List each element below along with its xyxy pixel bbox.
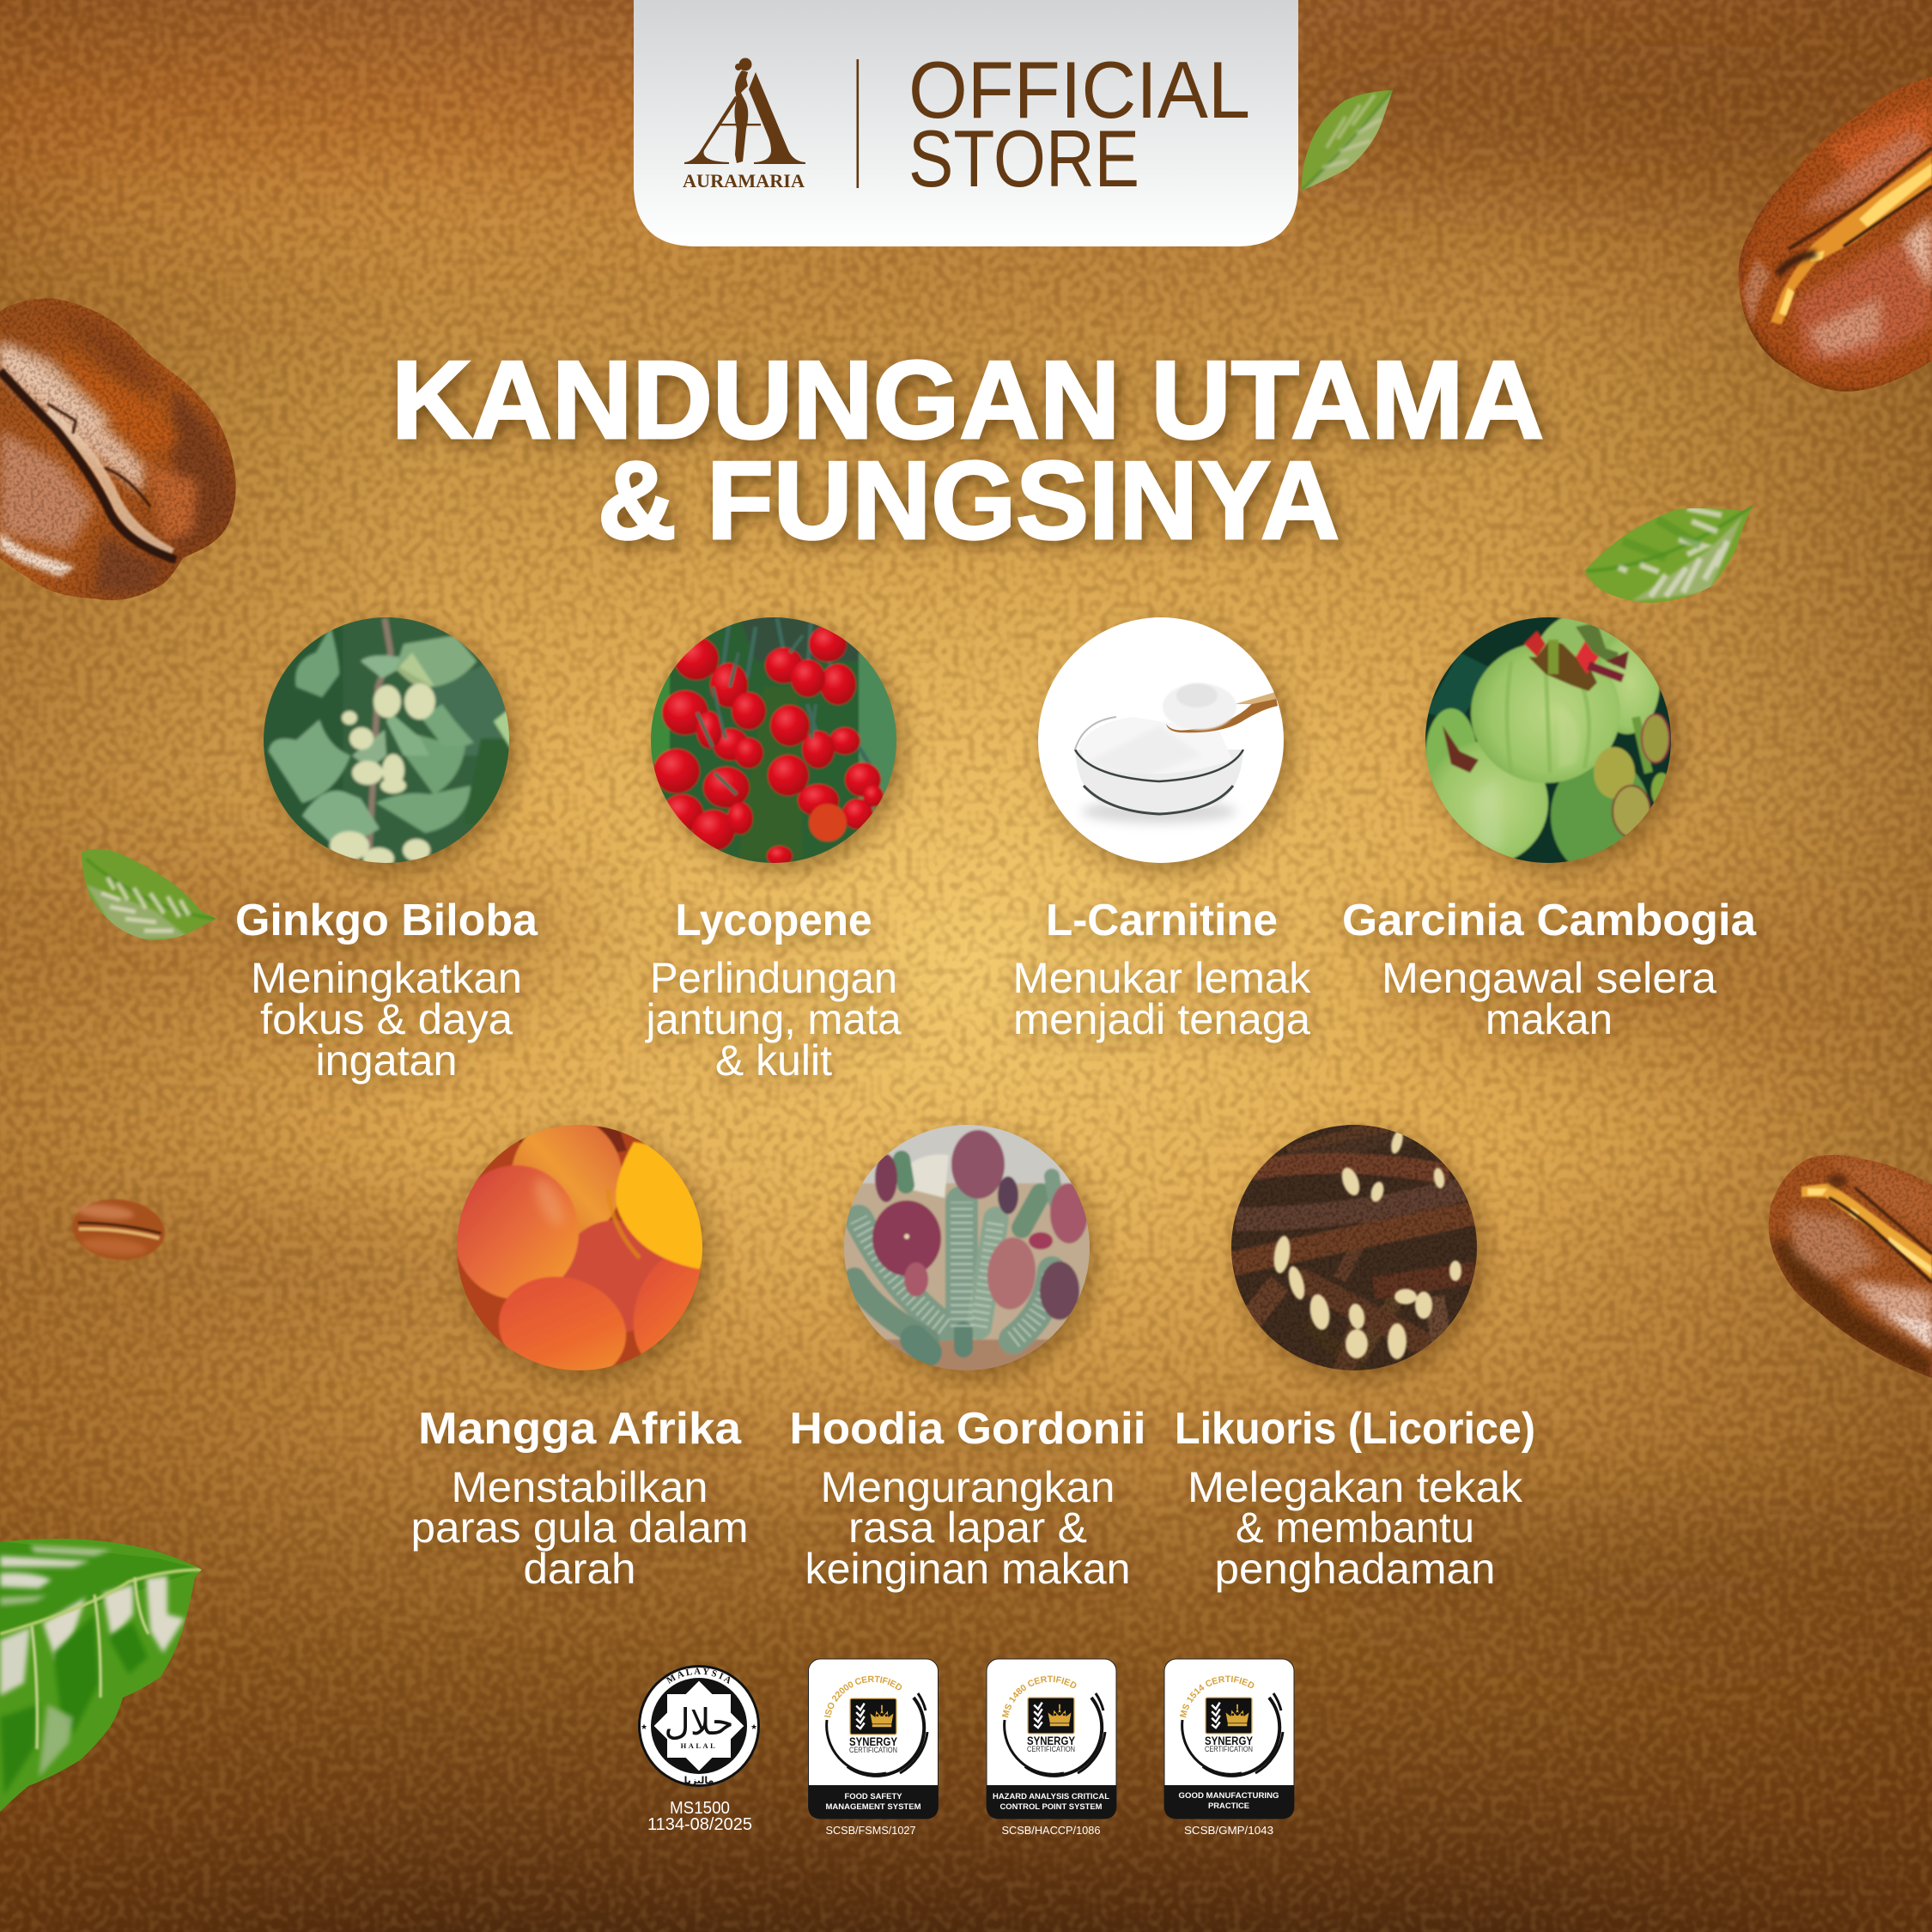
coffee bean: small left (70, 1195, 167, 1264)
badge: halal malaysia: 1134-08/2025 (647, 1815, 752, 1834)
title: KANDUNGAN UTAMA (392, 338, 1544, 462)
ingredient: mangga afrika: paras gula dalam (410, 1504, 749, 1552)
ingredient: likuoris (1175, 1404, 1535, 1593)
badge: iso 22000: MANAGEMENT SYSTEM (826, 1802, 921, 1812)
ingredient: hoodia gordonii: keinginan makan (805, 1545, 1130, 1593)
coffee bean: top right (1738, 77, 1932, 392)
coffee bean: right lower (1752, 1142, 1932, 1387)
badge: ms 1514: PRACTICE (1208, 1801, 1249, 1811)
ingredient: lycopene (645, 896, 902, 1084)
photo: lycopene tomatoes (644, 614, 902, 867)
badge: iso 22000: SCSB/FSMS/1027 (826, 1824, 915, 1837)
photo: ginkgo biloba (258, 614, 515, 870)
ingredient: mangga afrika: darah (524, 1545, 635, 1593)
badge: ms 1480: CONTROL POINT SYSTEM (999, 1802, 1103, 1812)
badge: halal malaysia: ★ (641, 1722, 647, 1731)
ingredient: mangga afrika: Menstabilkan (452, 1463, 708, 1511)
badge: halal malaysia: ماليزيا (684, 1775, 714, 1786)
badge: iso 22000: FOOD SAFETY (845, 1792, 902, 1801)
ingredient: ginkgo biloba: Ginkgo Biloba (235, 896, 538, 945)
badge: ms 1480: SCSB/HACCP/1086 (1001, 1824, 1101, 1837)
circle shadows (270, 626, 1678, 1379)
badge: ms 1514: CERTIFICATION (1205, 1745, 1253, 1753)
ingredient: garcinia cambogia: Mengawal selera (1382, 954, 1716, 1002)
photo: african mango (453, 1117, 718, 1395)
ingredient: likuoris: penghadaman (1214, 1545, 1496, 1593)
ingredient: mangga afrika (410, 1404, 749, 1593)
ingredient: hoodia gordonii: Mengurangkan (821, 1463, 1115, 1511)
divider (857, 59, 859, 188)
ingredient: hoodia gordonii: rasa lapar & (848, 1504, 1087, 1552)
ingredient: hoodia gordonii: Hoodia Gordonii (790, 1404, 1145, 1454)
badge: ms 1514 (1164, 1659, 1294, 1837)
ingredient: lycopene: Perlindungan (650, 954, 897, 1002)
ingredient: l-carnitine: menjadi tenaga (1013, 995, 1310, 1043)
badge: ms 1480: MS 1480 CERTIFIED (1002, 1676, 1077, 1717)
ingredient: likuoris: Melegakan tekak (1188, 1463, 1523, 1511)
store card (634, 0, 1298, 246)
logo: Auramaria (683, 58, 805, 191)
heading: official store: STORE (908, 113, 1139, 204)
ingredient: garcinia cambogia: Garcinia Cambogia (1342, 896, 1757, 945)
title: & FUNGSINYA (598, 439, 1340, 562)
badge: halal malaysia: حلال (664, 1701, 734, 1743)
badge: halal malaysia: MS1500 (670, 1799, 730, 1818)
badge: halal malaysia: HALAL (681, 1741, 717, 1750)
badge: ms 1514: MS 1514 CERTIFIED (1180, 1676, 1254, 1717)
ingredient: l-carnitine: Menukar lemak (1013, 954, 1312, 1002)
badge: ms 1514: SYNERGY (1205, 1735, 1253, 1747)
heading: official store: OFFICIAL (908, 45, 1250, 135)
badge: halal malaysia (638, 1665, 760, 1834)
ingredient: ginkgo biloba: fokus & daya (260, 995, 513, 1043)
badge: iso 22000: CERTIFICATION (849, 1746, 897, 1754)
badge: iso 22000 (809, 1659, 938, 1837)
photo: hoodia gordonii (841, 1123, 1095, 1374)
ingredient: likuoris: Likuoris (Licorice) (1175, 1404, 1535, 1454)
ingredient: ginkgo biloba: Meningkatkan (251, 954, 522, 1002)
badge: ms 1480: CERTIFICATION (1027, 1745, 1075, 1753)
badge: ms 1514: SCSB/GMP/1043 (1184, 1824, 1273, 1837)
ingredient: lycopene: Lycopene (675, 896, 872, 945)
heading: official store (908, 45, 1250, 204)
photo: l-carnitine powder (1035, 614, 1288, 867)
badge: iso 22000: SYNERGY (849, 1735, 897, 1748)
ingredient: mangga afrika: Mangga Afrika (418, 1404, 742, 1454)
ingredient: hoodia gordonii (790, 1404, 1145, 1593)
leaf: small left (77, 841, 223, 945)
ingredient: l-carnitine: L-Carnitine (1046, 896, 1278, 945)
ingredient: garcinia cambogia (1342, 896, 1757, 1043)
logo: Auramaria: AURAMARIA (683, 170, 805, 191)
badge: ms 1480: HAZARD ANALYSIS CRITICAL (993, 1792, 1109, 1801)
ingredient: lycopene: & kulit (715, 1036, 832, 1084)
badge: ms 1514: GOOD MANUFACTURING (1178, 1791, 1279, 1801)
photo: licorice roots (1228, 1123, 1485, 1374)
title (392, 338, 1544, 562)
coffee bean: left (0, 292, 245, 610)
badge: halal malaysia: ★ (750, 1722, 757, 1731)
badge: ms 1480 (987, 1659, 1116, 1837)
badge: iso 22000: ISO 22000 CERTIFIED (824, 1676, 902, 1717)
badge: ms 1480: SYNERGY (1027, 1735, 1075, 1747)
leaf: top beside store card (1302, 90, 1393, 191)
leaf: large bottom left (0, 1533, 206, 1816)
ingredient: likuoris: & membantu (1236, 1504, 1474, 1552)
ingredient: lycopene: jantung, mata (645, 995, 902, 1043)
ingredient: l-carnitine (1013, 896, 1312, 1043)
photo: garcinia cambogia (1421, 610, 1679, 876)
ingredient: ginkgo biloba (235, 896, 538, 1084)
ingredient: ginkgo biloba: ingatan (316, 1036, 457, 1084)
leaf: middle right (1584, 505, 1753, 603)
ingredient: garcinia cambogia: makan (1485, 995, 1613, 1043)
badge: halal malaysia: M A L A Y S I A (665, 1668, 730, 1685)
